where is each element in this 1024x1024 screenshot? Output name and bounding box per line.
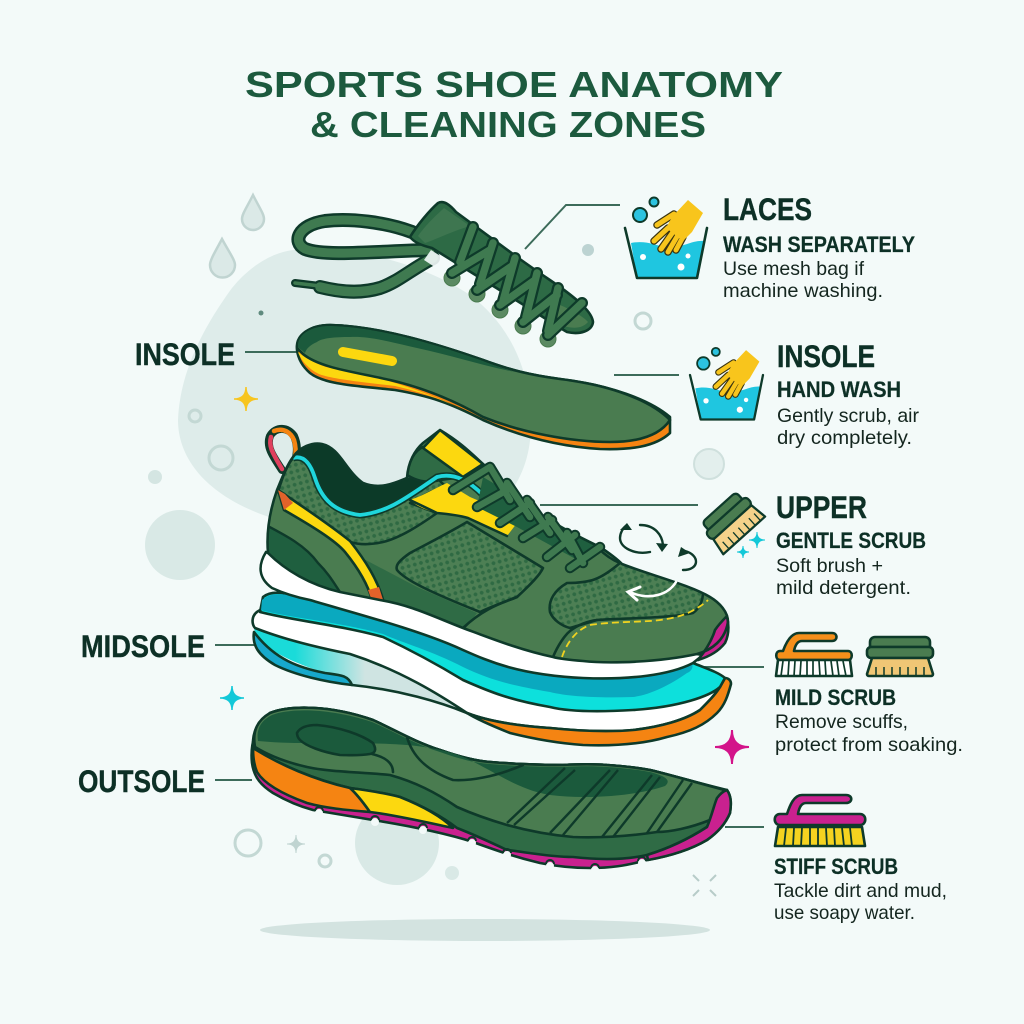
orange heel [253, 748, 370, 812]
sparkles [220, 387, 749, 896]
yellow heel stripe [278, 490, 384, 603]
water drops [210, 195, 264, 278]
text: upper: UPPER [776, 489, 867, 525]
background blob [178, 249, 531, 525]
part: midsole [253, 593, 731, 745]
left label: midsole: MIDSOLE [81, 628, 205, 664]
title: SPORTS SHOE ANATOMY [245, 64, 783, 105]
text: outsole [774, 854, 947, 924]
text: laces [723, 191, 915, 302]
icon: orange brush [776, 633, 852, 676]
criss-cross lacing [452, 227, 582, 335]
magenta toe bumper [698, 616, 728, 660]
cyan and teal band [260, 593, 725, 711]
part: insole [297, 325, 670, 449]
inner sole [254, 708, 725, 837]
tongue panel [407, 447, 463, 482]
ground shadow [260, 919, 710, 941]
shoe outline [267, 430, 728, 662]
text: insole [777, 338, 920, 449]
text: midsole: protect from soaking. [775, 734, 963, 756]
text: upper: GENTLE SCRUB [776, 528, 926, 553]
midsole heel wedge [254, 632, 352, 685]
text: outsole: Tackle dirt and mud, [774, 880, 947, 902]
outsole body [252, 708, 731, 868]
midfoot shadow [365, 560, 477, 628]
arch curve [407, 737, 523, 780]
yellow arch [350, 788, 453, 828]
icon: green brush [867, 637, 933, 676]
text: upper: Soft brush + [776, 555, 883, 577]
text: insole: Gently scrub, air [777, 405, 920, 427]
dark upper tone [258, 710, 668, 797]
decorative circles and bubbles [145, 244, 724, 885]
toe cap line [553, 620, 597, 657]
collar lining [298, 444, 422, 512]
toe tip magenta [647, 790, 731, 860]
lace loops [295, 220, 433, 292]
leader lines [215, 205, 764, 827]
left label: insole: INSOLE [135, 336, 235, 372]
outsole rim [253, 708, 725, 859]
text: laces: Use mesh bag if [723, 258, 865, 280]
text: laces: WASH SEPARATELY [723, 232, 915, 257]
cyan collar line [293, 457, 483, 515]
part: outsole [252, 708, 731, 874]
text: outsole: use soapy water. [774, 902, 915, 924]
text: laces: LACES [723, 191, 812, 227]
heel cup oval [297, 725, 375, 755]
icon: soft brush [698, 488, 765, 558]
toe mesh panel [550, 563, 703, 628]
toe stitching [562, 600, 708, 657]
text: insole: dry completely. [777, 427, 912, 449]
title: & CLEANING ZONES [310, 104, 706, 145]
orange outsole edge [467, 678, 731, 745]
text: outsole: STIFF SCRUB [774, 854, 898, 879]
yellow tongue top [423, 430, 483, 477]
text: insole: INSOLE [777, 338, 875, 374]
text: midsole: MILD SCRUB [775, 685, 896, 710]
eyelets [444, 270, 556, 347]
tread notches [315, 807, 646, 874]
eyestay yellow [410, 483, 517, 536]
heel pull tab [269, 429, 297, 470]
text: upper [776, 489, 926, 599]
part: upper shoe [260, 429, 728, 678]
text: midsole [775, 685, 963, 756]
lace bed [478, 478, 594, 558]
left label: outsole: OUTSOLE [78, 763, 205, 799]
white top sole [261, 552, 703, 678]
icon: magenta stiff brush [775, 795, 865, 846]
text: upper: mild detergent. [776, 577, 911, 599]
side mesh panel [397, 522, 543, 612]
gel section [254, 628, 467, 713]
text: insole: HAND WASH [777, 377, 901, 402]
tongue [410, 202, 593, 333]
insole heel pad [343, 352, 392, 361]
shoe laces [453, 467, 600, 568]
part: laces [295, 202, 593, 347]
icon: laces hand wash [625, 198, 707, 278]
white band [253, 610, 720, 731]
text: laces: machine washing. [723, 280, 883, 302]
icon: insole hand wash [690, 348, 763, 420]
text: midsole: Remove scuffs, [775, 711, 908, 733]
tread ribs [507, 768, 692, 837]
toe collar line [601, 551, 618, 564]
shoe body [267, 430, 728, 662]
cleaning motion arrows [620, 523, 696, 570]
heel counter [268, 526, 341, 591]
heel mesh [278, 457, 445, 544]
title [245, 64, 783, 145]
white rotation arrow on toe [628, 582, 676, 600]
